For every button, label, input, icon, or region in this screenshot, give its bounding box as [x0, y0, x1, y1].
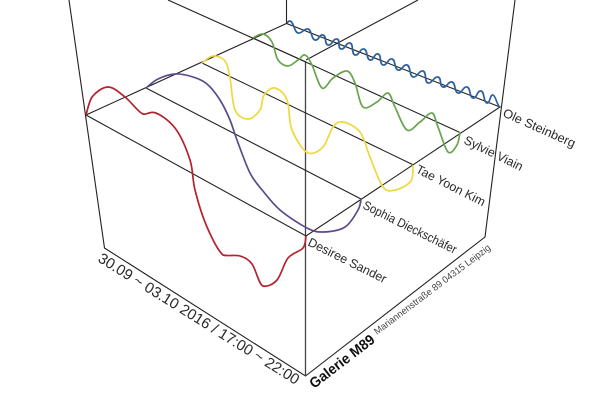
- venue name: Galerie M89: [307, 332, 378, 392]
- curve: Sophia Dieckschäfer (purple): [146, 74, 361, 232]
- curve: Desiree Sander (red): [86, 87, 306, 286]
- label: Ole Steinberg: Ole Steinberg: [501, 106, 578, 150]
- label: Desiree Sander: Desiree Sander: [306, 235, 389, 286]
- label: Sylvie Viain: Sylvie Viain: [462, 133, 525, 174]
- date and time: 30.09 ~ 03.10 2016 / 17:00 ~ 22:00: [95, 250, 302, 388]
- curve: Tae Yoon Kim (yellow): [202, 56, 413, 191]
- curve: Sylvie Viain (green): [253, 34, 460, 153]
- venue address: Mariannenstraße 89 04315 Leipzig: [372, 243, 493, 337]
- label: Sophia Dieckschäfer: Sophia Dieckschäfer: [361, 198, 459, 257]
- wireframe cube: [69, 0, 515, 376]
- label: Tae Yoon Kim: Tae Yoon Kim: [414, 162, 488, 209]
- curve: Ole Steinberg (blue): [287, 21, 500, 107]
